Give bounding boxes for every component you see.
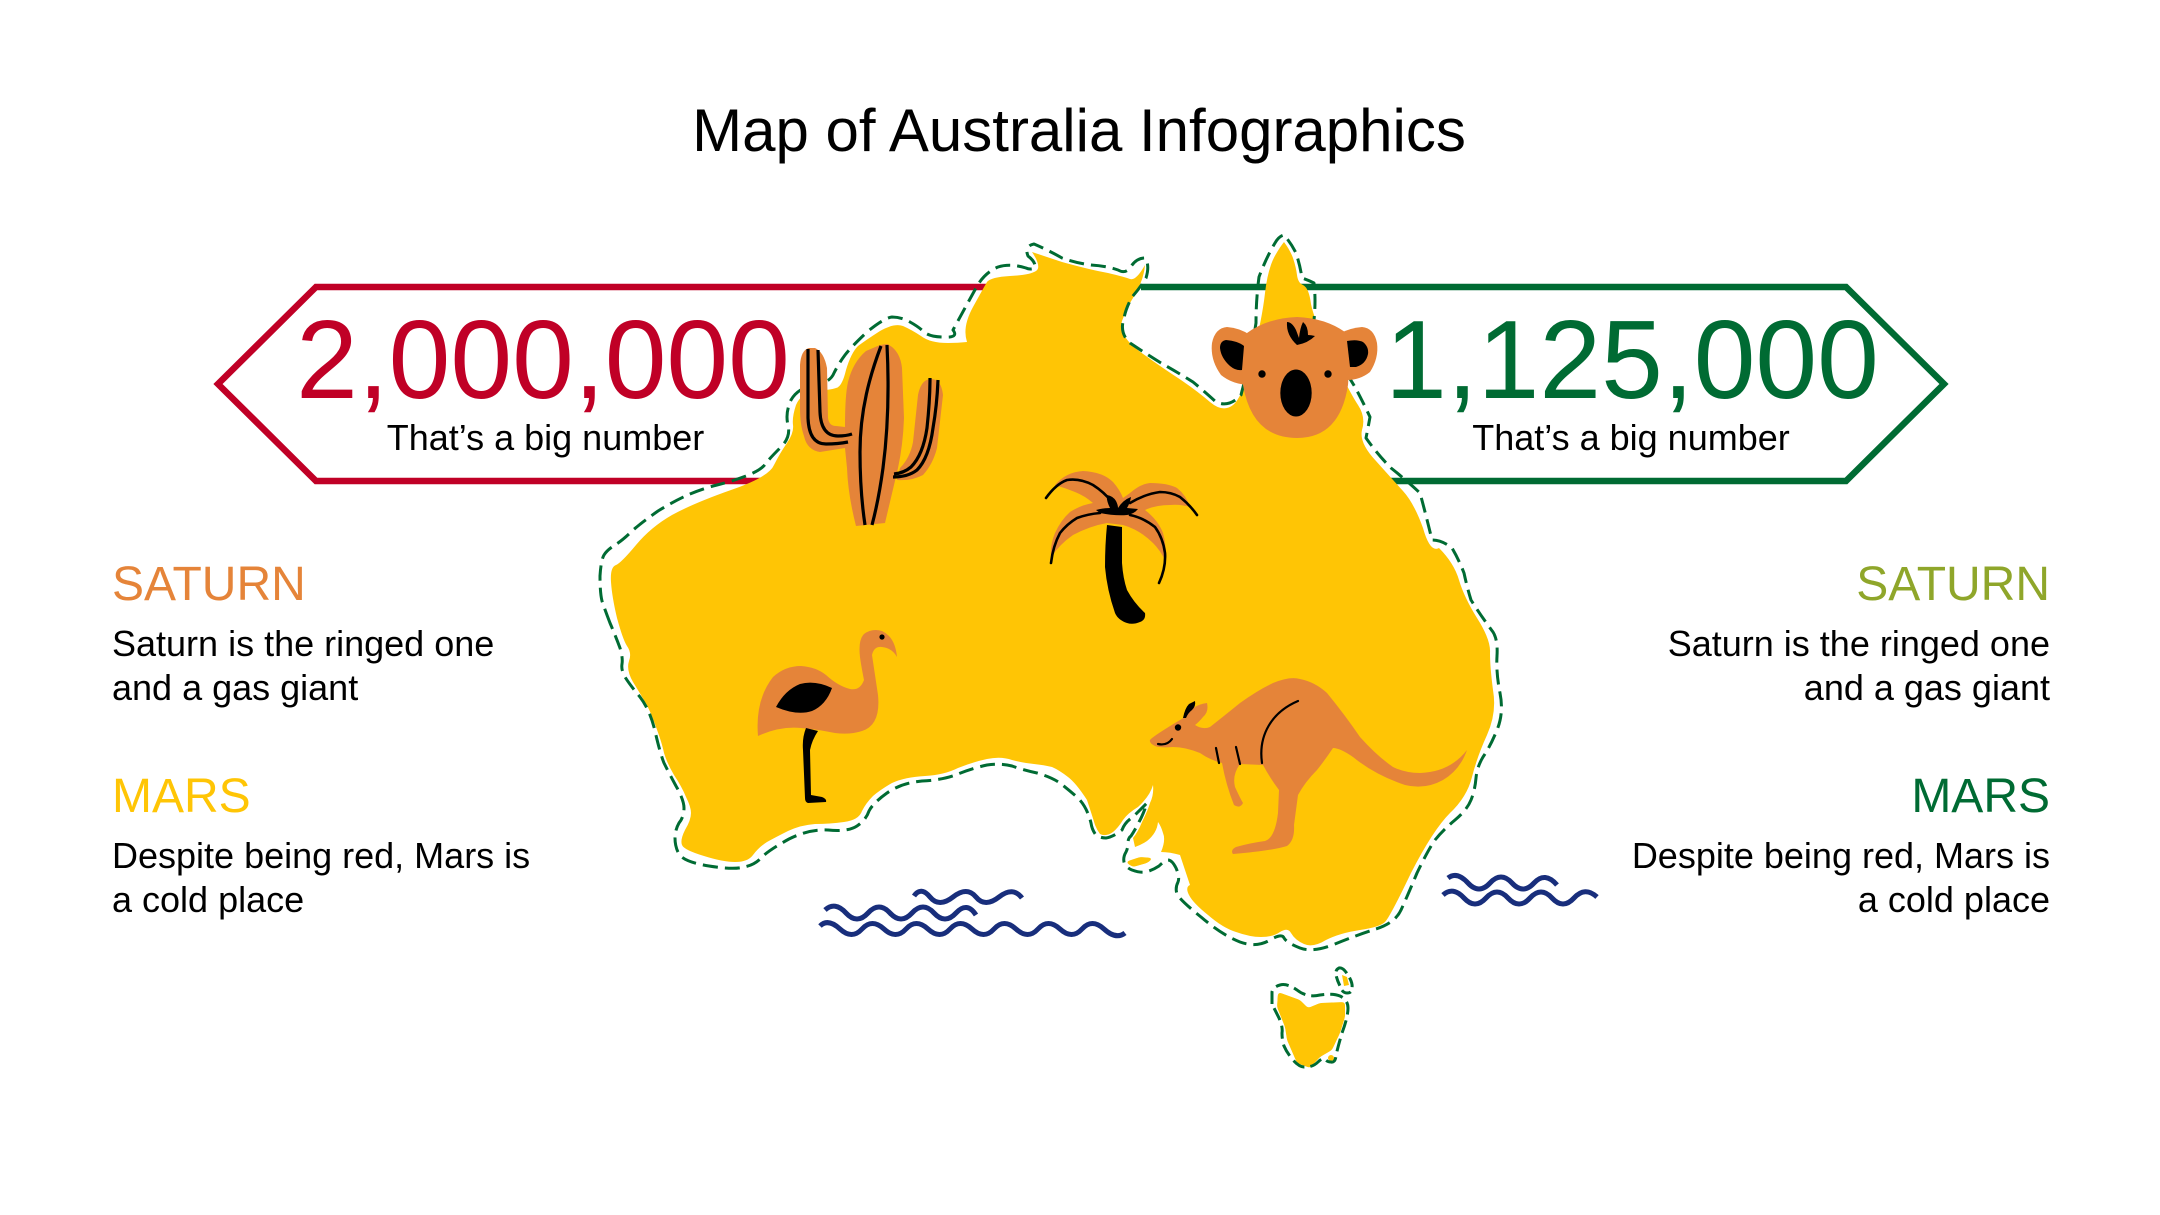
banner: red left <box>218 287 990 481</box>
heading: mars right: MARS <box>1911 770 2050 823</box>
heading: saturn left: SATURN <box>112 558 306 611</box>
right text column <box>1632 558 2050 920</box>
dashed coastline flinders island <box>1336 968 1352 993</box>
waves: right <box>1443 875 1597 904</box>
left text column <box>112 558 530 920</box>
tasmania islet <box>1328 1055 1334 1061</box>
dashed coastline tasmania <box>1272 985 1348 1067</box>
mainland <box>611 242 1494 945</box>
map of Australia <box>600 235 1501 1068</box>
heading: saturn right: SATURN <box>1856 558 2050 611</box>
text: mars description right: a cold place <box>1858 879 2050 920</box>
tasmania <box>1277 992 1345 1068</box>
red banner caption: That’s a big number <box>387 417 704 458</box>
wave middle <box>825 906 976 919</box>
icon: cactus <box>800 344 943 526</box>
wave lower <box>1443 891 1597 904</box>
dashed coastline mainland <box>600 235 1501 950</box>
flinders island <box>1342 975 1349 986</box>
text: saturn description left: Saturn is the ringed one <box>112 623 494 664</box>
text: saturn description right: Saturn is the ringed one <box>1668 623 2050 664</box>
title: Map of Australia Infographics <box>692 97 1466 164</box>
text: saturn description left: and a gas giant <box>112 667 358 708</box>
icon: koala <box>1212 317 1377 438</box>
green arrow banner outline <box>1141 287 1944 481</box>
text: mars description right: Despite being red, Mars is <box>1632 835 2050 876</box>
icon: palm tree <box>1046 471 1197 624</box>
text: saturn description right: and a gas giant <box>1804 667 2050 708</box>
text: mars description left: a cold place <box>112 879 304 920</box>
text: mars description left: Despite being red, Mars is <box>112 835 530 876</box>
banner: green right <box>1141 287 1944 481</box>
red arrow banner outline <box>218 287 990 481</box>
green banner caption: That’s a big number <box>1472 417 1790 458</box>
wave upper <box>1448 875 1557 889</box>
red big number: 2,000,000 <box>296 298 790 422</box>
icon: flamingo <box>758 630 897 803</box>
green big number: 1,125,000 <box>1385 298 1879 422</box>
waves: left <box>820 891 1125 936</box>
heading: mars left: MARS <box>112 770 251 823</box>
wave top <box>914 891 1022 902</box>
icon: kangaroo <box>1150 678 1467 854</box>
kangaroo island <box>1125 857 1154 867</box>
wave bottom <box>820 923 1125 936</box>
